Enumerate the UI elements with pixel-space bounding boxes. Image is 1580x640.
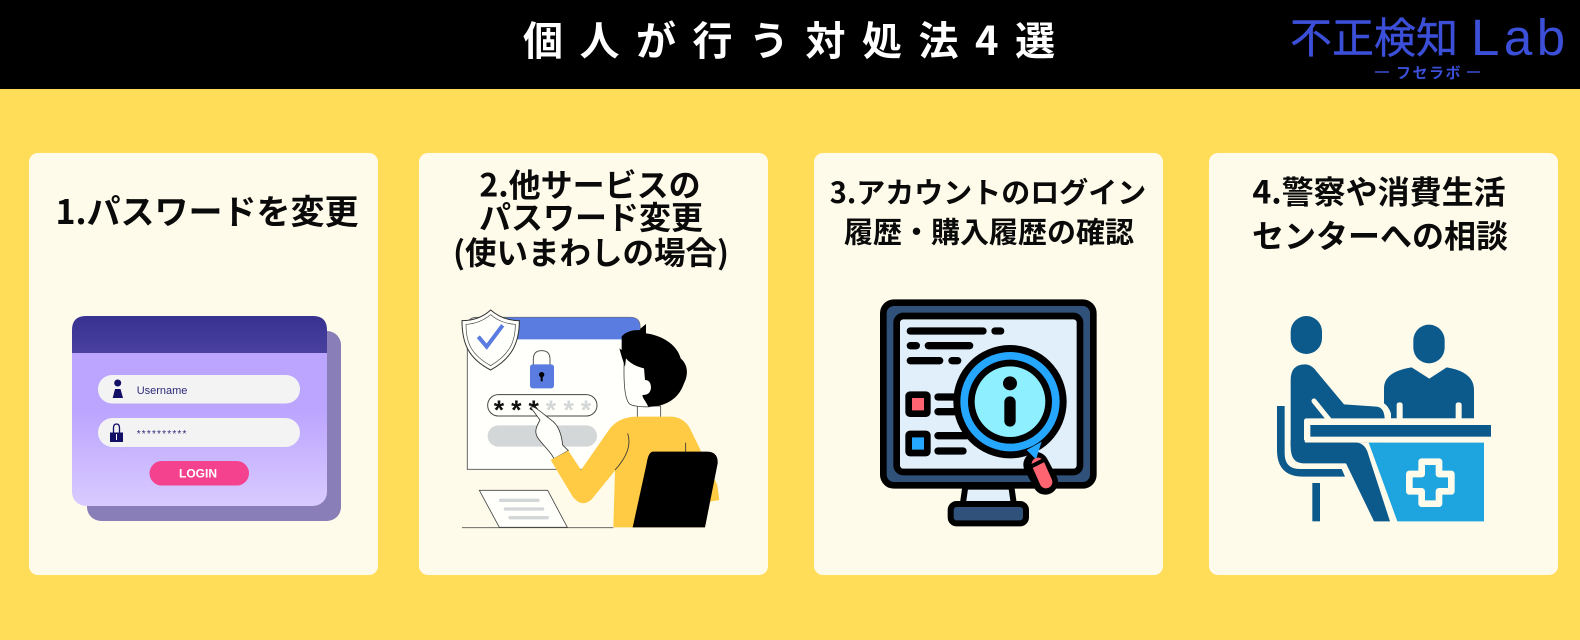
logo: フセラボ <box>1396 62 1462 83</box>
icon: consultation at desk <box>1277 316 1493 521</box>
icon: person entering password: * <box>563 395 574 425</box>
heading: step 3: 履歴・購入履歴の確認 <box>844 210 1134 252</box>
heading: step 4: センターへの相談 <box>1252 212 1508 258</box>
icon: person entering password: * <box>528 395 539 425</box>
icon: person entering password: * <box>546 395 557 425</box>
header band <box>0 0 1580 89</box>
heading: step 3: 3.アカウントのログイン <box>830 170 1146 212</box>
icon: person entering password <box>462 310 719 528</box>
icon: login window: ********** <box>137 429 188 440</box>
heading: step 1: 1.パスワードを変更 <box>55 185 359 234</box>
heading: step 4 <box>1252 168 1508 258</box>
icon: login window: Username <box>137 385 187 397</box>
icon: login window: LOGIN <box>179 467 217 481</box>
icon: person entering password: * <box>494 395 505 425</box>
icon: monitor with magnifier <box>883 303 1093 523</box>
panel: step 3 <box>814 153 1163 575</box>
heading: step 4: 4.警察や消費生活 <box>1252 168 1506 214</box>
icon: login window <box>72 316 341 521</box>
icon: person entering password: * <box>581 395 592 425</box>
icon: person entering password: * <box>511 395 522 425</box>
heading: step 3 <box>830 170 1146 252</box>
heading: step 2 <box>453 160 729 274</box>
logo <box>1290 5 1570 83</box>
logo: 不正検知 <box>1290 5 1458 66</box>
panel: step 4 <box>1209 153 1558 575</box>
panel: step 1 <box>29 153 378 575</box>
panel: step 2 <box>419 153 768 575</box>
heading: step 2: 2.他サービスの <box>479 160 701 206</box>
heading: step 2: パスワード変更 <box>479 193 703 239</box>
logo: Lab <box>1471 9 1570 66</box>
title: 個人が行う対処法4選 <box>523 9 1072 67</box>
heading: step 2: (使いまわしの場合) <box>453 228 729 274</box>
